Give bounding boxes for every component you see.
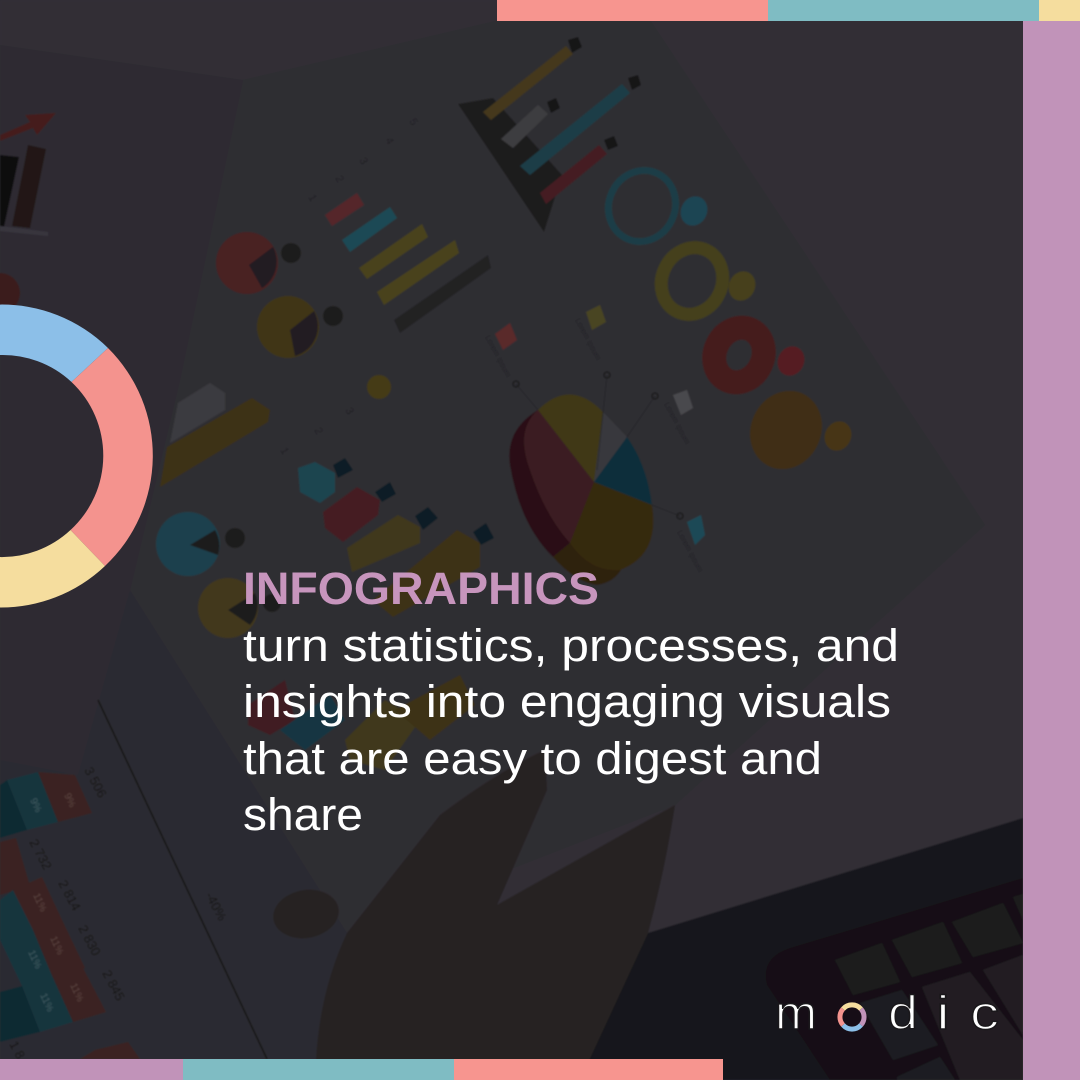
data table: -40%	[202, 889, 230, 924]
pie: yellow lower	[198, 578, 281, 638]
axis numbers: 1	[277, 446, 291, 457]
body text: that are easy to digest and	[243, 733, 822, 784]
axis numbers: 4	[382, 136, 396, 147]
pie: yellow	[257, 296, 391, 399]
3D pie chart	[483, 305, 705, 585]
main paper sheet	[130, 20, 985, 933]
body text: insights into engaging visuals	[243, 676, 891, 727]
data table: 9%	[27, 797, 43, 814]
icon: logo ring	[840, 1005, 864, 1029]
headline text	[243, 563, 899, 840]
axis numbers: 2	[332, 174, 346, 185]
logo: modic: c	[970, 986, 999, 1039]
body text: turn statistics, processes, and	[243, 620, 899, 671]
data table: 2 845	[99, 967, 128, 1003]
data table: 2 814	[55, 877, 84, 913]
left paper sheet	[0, 45, 243, 775]
body text	[243, 620, 899, 840]
heading: INFOGRAPHICS	[243, 563, 599, 614]
donut segment: yellow	[0, 530, 105, 608]
data table: 3 506	[81, 764, 110, 800]
3D pyramid bar chart	[458, 37, 641, 232]
lower paper sheet	[0, 590, 347, 1059]
data table: 11%	[37, 992, 55, 1014]
mini bar chart with arrow	[0, 113, 56, 313]
3D pie chart: Lorem ipsum	[573, 317, 603, 362]
data table	[0, 700, 267, 1061]
logo: modic	[775, 986, 999, 1039]
donut segment: pink	[70, 348, 153, 566]
axis numbers: 5	[406, 116, 420, 128]
pie: teal	[156, 512, 245, 576]
data table: 11%	[67, 982, 85, 1004]
data table: 2 732	[26, 836, 55, 872]
donut chart	[0, 305, 153, 608]
data table: 9%	[61, 792, 77, 809]
cubes behind text	[248, 675, 475, 770]
data table: 11%	[25, 949, 43, 971]
logo: modic: d	[888, 986, 918, 1039]
top colour bar	[497, 0, 1080, 21]
bottom colour bar	[0, 1059, 723, 1080]
right colour bar	[1023, 21, 1080, 1080]
axis numbers: 3	[342, 406, 356, 417]
axis numbers: 3	[356, 156, 370, 167]
data table: 11%	[30, 892, 48, 914]
data table: 1 8	[6, 1038, 28, 1061]
data table: 11%	[47, 935, 65, 957]
horizontal bars chart	[325, 193, 491, 333]
rings with badges	[597, 159, 856, 481]
3D bars on left	[160, 383, 270, 487]
data table: 2 830	[75, 922, 104, 958]
body text: share	[243, 789, 363, 840]
3D pie chart: Lorem ipsum	[662, 401, 692, 446]
cubes chart	[298, 458, 494, 617]
donut segment: blue	[0, 305, 108, 382]
3D pie chart: Lorem ipsum	[675, 529, 705, 574]
logo: modic: i	[936, 986, 950, 1039]
3D pie chart: Lorem ipsum	[483, 334, 513, 379]
axis numbers: 2	[311, 426, 325, 437]
pie: red	[216, 232, 301, 294]
logo: modic: m	[775, 986, 817, 1039]
desk and keyboard	[580, 818, 1023, 1080]
axis numbers	[277, 116, 420, 457]
hand holding the paper	[269, 750, 675, 1060]
axis numbers: 1	[305, 192, 319, 204]
